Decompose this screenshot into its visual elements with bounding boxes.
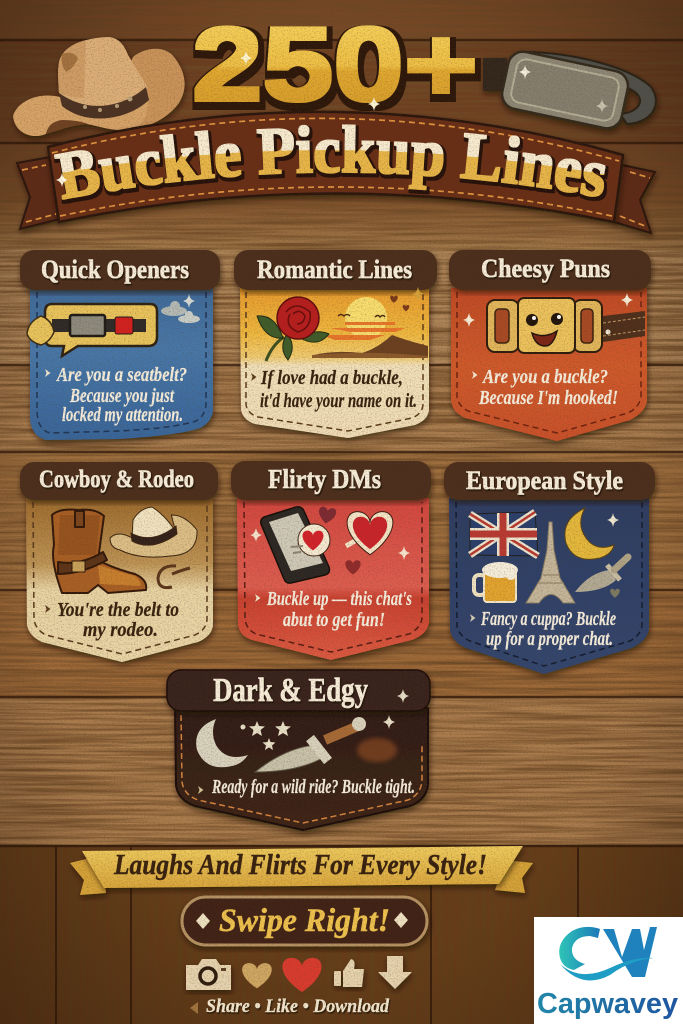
quote text (472, 366, 618, 409)
panel: Flirty DMs (231, 461, 431, 660)
icon: crescent moon (196, 719, 248, 767)
button: Swipe Right: Swipe Right! (219, 903, 390, 939)
quote text: If love had a buckle, (260, 367, 403, 389)
big number: 250+: 250+ (192, 7, 478, 123)
logo: Capwavey: Capwavey (537, 988, 678, 1020)
icon: stars (240, 715, 395, 750)
pocket (237, 498, 429, 660)
caption: Share Like Download: Share • Like • Download (206, 996, 389, 1017)
quote text: Are you a buckle? (481, 366, 608, 388)
icon: cowboy boot (52, 510, 146, 593)
quote text: Are you a seatbelt? (55, 364, 187, 386)
icon: phone with heart bubble (261, 507, 330, 583)
icon: red heart (282, 958, 322, 992)
banner: Laughs And Flirts: Laughs And Flirts For Every Style! (113, 850, 487, 881)
panel: Dark & Edgy: Dark & Edgy (213, 672, 368, 709)
header (234, 250, 437, 290)
ribbon tails (17, 157, 655, 233)
panel: Cowboy & Rodeo (20, 462, 218, 662)
quote text: Because you just (69, 385, 175, 407)
icon: small hearts and sparkles (250, 506, 410, 575)
quote text: Because I'm hooked! (478, 387, 618, 409)
pocket (451, 288, 647, 441)
header (20, 250, 220, 290)
panel: Dark & Edgy (167, 670, 430, 830)
panel: Romantic Lines: Romantic Lines (257, 255, 412, 284)
quote text (255, 588, 412, 631)
quote text: it'd have your name on it. (260, 390, 417, 412)
pocket (26, 498, 213, 662)
quote text: You're the belt to (57, 599, 179, 621)
icon: beer mug (474, 562, 518, 602)
quote text: up for a proper chat. (486, 628, 613, 650)
icon: belt buckle (483, 49, 656, 131)
icon: seatbelt speech bubble (27, 304, 157, 356)
quote text (45, 364, 187, 426)
icon: dagger (575, 570, 616, 592)
button: Swipe Right (182, 897, 427, 945)
pocket (449, 498, 649, 674)
icon: thumbs up (334, 959, 364, 987)
quote text (198, 776, 415, 798)
icon: horseshoe (158, 566, 190, 588)
icon: cream hat (110, 507, 197, 557)
icon: clouds and star (161, 294, 200, 323)
quote text: abut to get fun! (283, 609, 385, 631)
icon: union flag (470, 512, 538, 556)
icon: sparkles (463, 293, 633, 327)
header (231, 461, 431, 500)
pocket (30, 288, 213, 440)
icon: dagger (255, 717, 366, 772)
icon: camera (186, 959, 231, 990)
pocket (175, 708, 428, 830)
ribbon body (48, 112, 623, 222)
panel: Cheesy Puns (449, 250, 651, 441)
quote text: locked my attention. (62, 404, 183, 426)
icon: red rose (257, 297, 329, 361)
panel: Romantic Lines (234, 250, 437, 438)
panel: European Style (444, 462, 655, 674)
quote text: Ready for a wild ride? Buckle tight. (211, 776, 415, 798)
quote text: Fancy a cuppa? Buckle (480, 608, 616, 630)
icon: smiling buckle (487, 298, 645, 353)
quote text: my rodeo. (83, 619, 158, 641)
quote text (470, 608, 616, 650)
panel: Quick Openers (20, 250, 220, 440)
quote text (45, 599, 179, 641)
panel: Flirty DMs: Flirty DMs (268, 464, 381, 494)
quote text (251, 367, 417, 412)
banner: Laughs And Flirts (70, 846, 533, 895)
logo: Capwavey (534, 917, 683, 1024)
title ribbon (15, 110, 659, 240)
panel: Cheesy Puns: Cheesy Puns (481, 254, 610, 283)
panel: Quick Openers: Quick Openers (41, 255, 189, 284)
icon: cowboy hat (13, 37, 185, 136)
illustration: sunset (312, 296, 428, 358)
icon: crescent moon (565, 508, 614, 559)
header (444, 462, 655, 500)
header (167, 670, 430, 711)
pocket (240, 288, 429, 438)
title: Buckle Pickup Lines: Buckle Pickup Lines (54, 124, 608, 204)
quote text: Buckle up — this chat's (266, 588, 412, 610)
panel: European Style: European Style (466, 466, 623, 495)
header (449, 250, 651, 290)
header (20, 462, 218, 500)
panel: Cowboy & Rodeo: Cowboy & Rodeo (39, 466, 194, 493)
icon: heart speech bubble (346, 512, 393, 555)
icon: eiffel tower (526, 522, 575, 603)
icon: tan heart (242, 963, 272, 988)
icon: download arrow (378, 956, 412, 989)
logo mark (559, 927, 657, 980)
